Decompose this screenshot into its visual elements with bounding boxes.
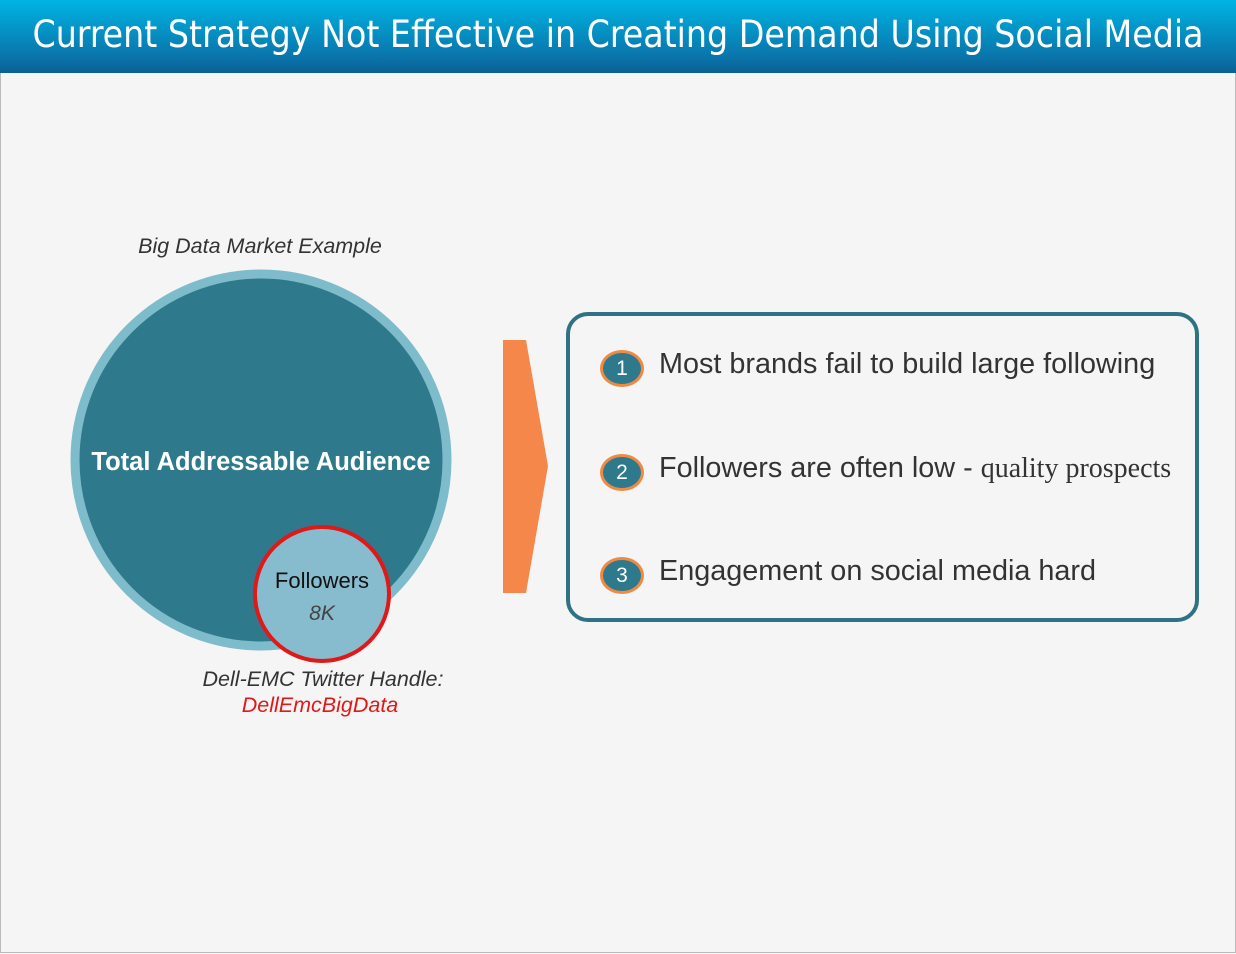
circle: total addressable audience bbox=[75, 274, 447, 646]
point 1: Most brands fail to build large following bbox=[659, 348, 1155, 380]
arrow bbox=[503, 340, 548, 593]
point 2: 2 bbox=[616, 461, 628, 484]
circle: followers: Followers bbox=[275, 568, 369, 593]
circle: followers bbox=[255, 527, 389, 661]
caption: twitter handle: Dell-EMC Twitter Handle: bbox=[203, 667, 443, 691]
caption: twitter handle bbox=[203, 667, 443, 717]
point 1: 1 bbox=[616, 357, 628, 380]
caption: big data market example: Big Data Market Example bbox=[138, 234, 382, 258]
title bar bbox=[0, 0, 1236, 73]
panel: key points bbox=[566, 312, 1199, 622]
point 3: Engagement on social media hard bbox=[659, 555, 1096, 587]
circle: total addressable audience: Total Addressable Audience bbox=[91, 448, 431, 476]
point 2: Followers are often low - quality prospects bbox=[659, 452, 1171, 484]
point 3: 3 bbox=[616, 564, 628, 587]
circle: followers: 8K bbox=[309, 602, 336, 625]
venn diagram bbox=[70, 270, 452, 663]
title bar: Current Strategy Not Effective in Creating Demand Using Social Media bbox=[32, 13, 1204, 56]
caption: twitter handle: DellEmcBigData bbox=[242, 693, 398, 717]
